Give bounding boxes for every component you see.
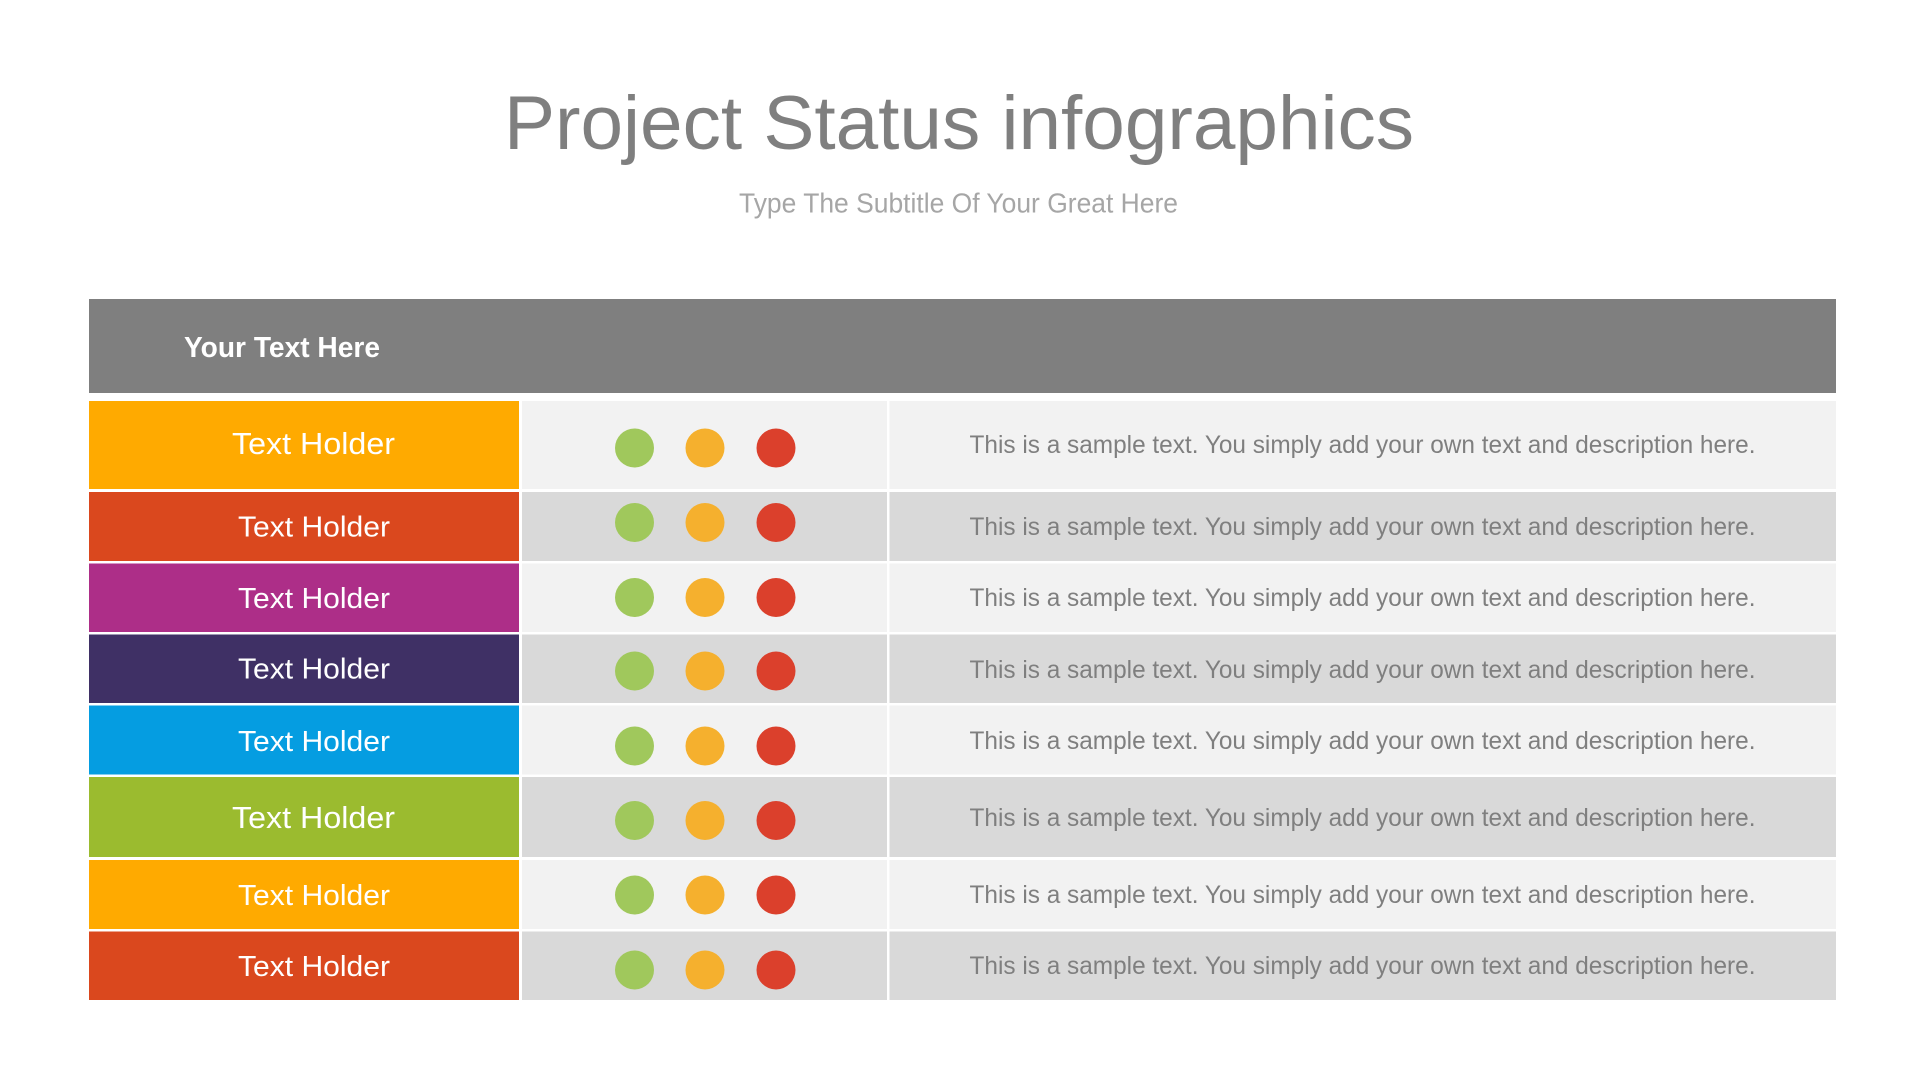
status table — [89, 401, 1836, 1000]
row 7: This is a sample text. You simply add your own text and description here. — [970, 881, 1756, 909]
row 2 — [89, 492, 1836, 561]
row 4: This is a sample text. You simply add your own text and description here. — [970, 656, 1756, 684]
row 2: Text Holder — [238, 512, 390, 544]
row 5: Text Holder — [238, 726, 390, 758]
row 7 — [89, 860, 1836, 929]
row 2: This is a sample text. You simply add your own text and description here. — [970, 513, 1756, 541]
header bar — [89, 299, 1836, 393]
row 6: This is a sample text. You simply add your own text and description here. — [970, 804, 1756, 832]
row 5: This is a sample text. You simply add your own text and description here. — [970, 727, 1756, 755]
row 1: Text Holder — [232, 426, 395, 461]
row 8: This is a sample text. You simply add your own text and description here. — [970, 952, 1756, 980]
subtitle: Type The Subtitle Of Your Great Here — [739, 188, 1178, 218]
row 3 — [89, 564, 1836, 632]
row 7: Text Holder — [238, 880, 390, 912]
title: Project Status infographics — [504, 81, 1414, 166]
header label: Your Text Here — [184, 332, 380, 364]
row 3: This is a sample text. You simply add your own text and description here. — [970, 584, 1756, 612]
row 6: Text Holder — [232, 800, 395, 835]
row 6 — [89, 777, 1836, 857]
row 1 — [89, 401, 1836, 489]
row 5 — [89, 706, 1836, 774]
row 8: Text Holder — [238, 951, 390, 983]
row 4 — [89, 634, 1836, 703]
row 3: Text Holder — [238, 583, 390, 615]
row 4: Text Holder — [238, 654, 390, 686]
row 1: This is a sample text. You simply add your own text and description here. — [970, 431, 1756, 459]
row 8 — [89, 932, 1836, 1000]
